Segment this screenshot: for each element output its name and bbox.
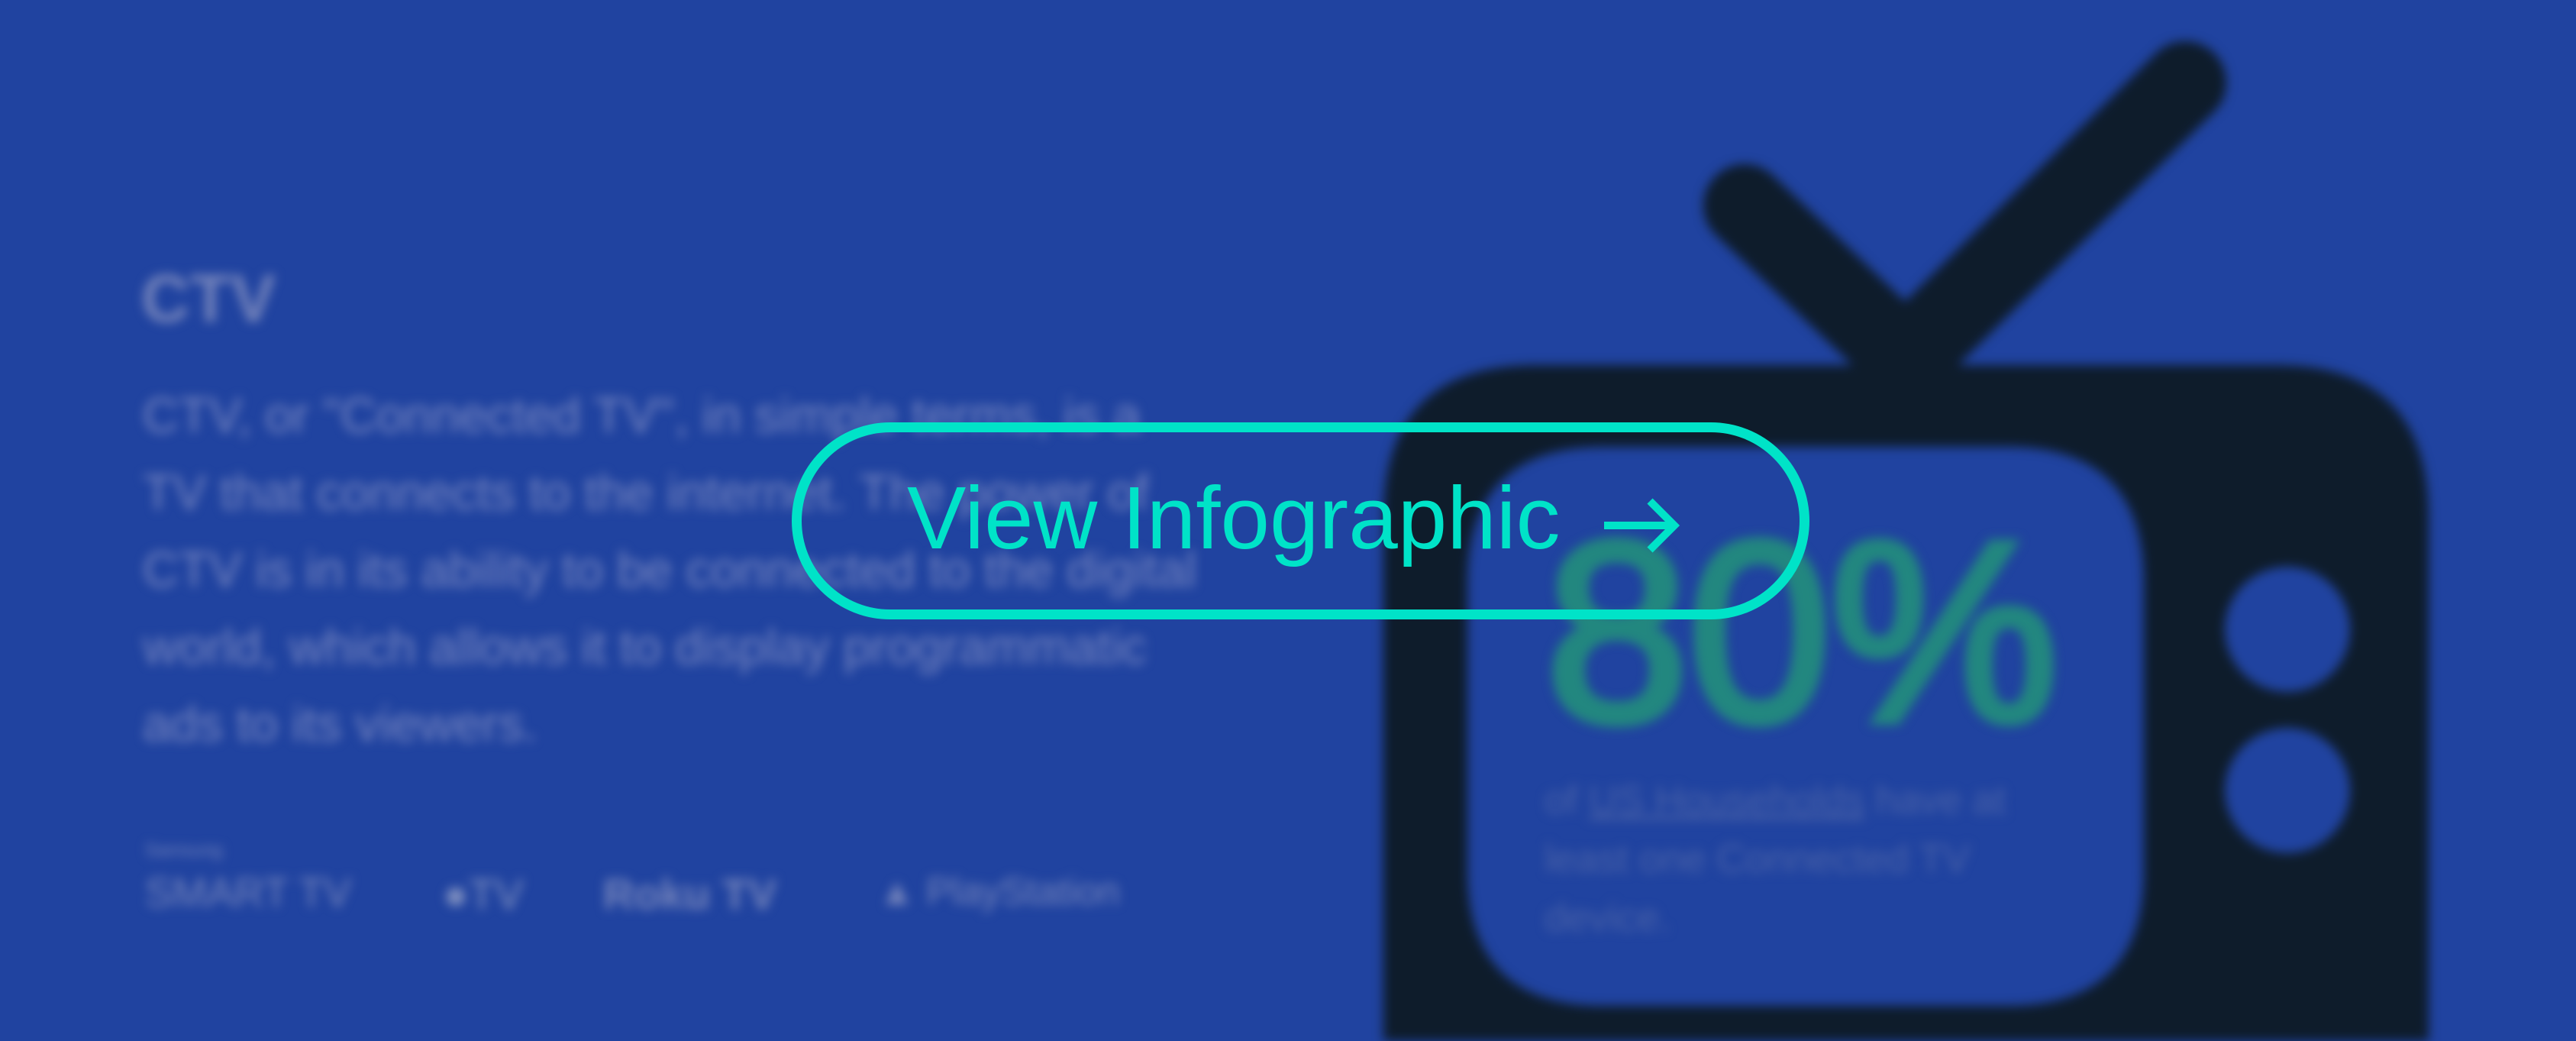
icon: arrow <box>1604 498 1680 553</box>
tv body <box>1383 365 2429 1041</box>
logo: samsung smart tv <box>144 840 353 916</box>
button: View Infographic <box>792 422 1809 619</box>
logo: playstation: ▲ PlayStation <box>878 870 1119 913</box>
stat caption: of US Households have at least one Connected TV device. <box>1545 778 2006 940</box>
body text: TV that connects to the internet. The power of <box>143 464 1149 520</box>
logo: apple tv: ●TV <box>443 870 523 918</box>
body text: CTV is in its ability to be connected to the digital <box>143 542 1196 597</box>
knobs <box>2225 567 2350 853</box>
logo: samsung smart tv: SMART TV <box>145 870 351 916</box>
logo: samsung smart tv: Samsung <box>145 840 222 861</box>
body text: CTV, or "Connected TV", in simple terms, is a <box>143 387 1141 443</box>
stat: 80%: 80% <box>1546 489 2058 774</box>
body text: world, which allows it to display programmatic <box>143 619 1147 674</box>
body text: ads to its viewers. <box>143 696 537 752</box>
body text <box>139 387 1199 752</box>
logos row <box>144 840 1122 918</box>
heading: CTV: CTV <box>141 260 276 336</box>
button label: View Infographic <box>907 468 1561 567</box>
antenna <box>1745 82 2185 359</box>
logo: roku tv: Roku TV <box>603 870 776 918</box>
